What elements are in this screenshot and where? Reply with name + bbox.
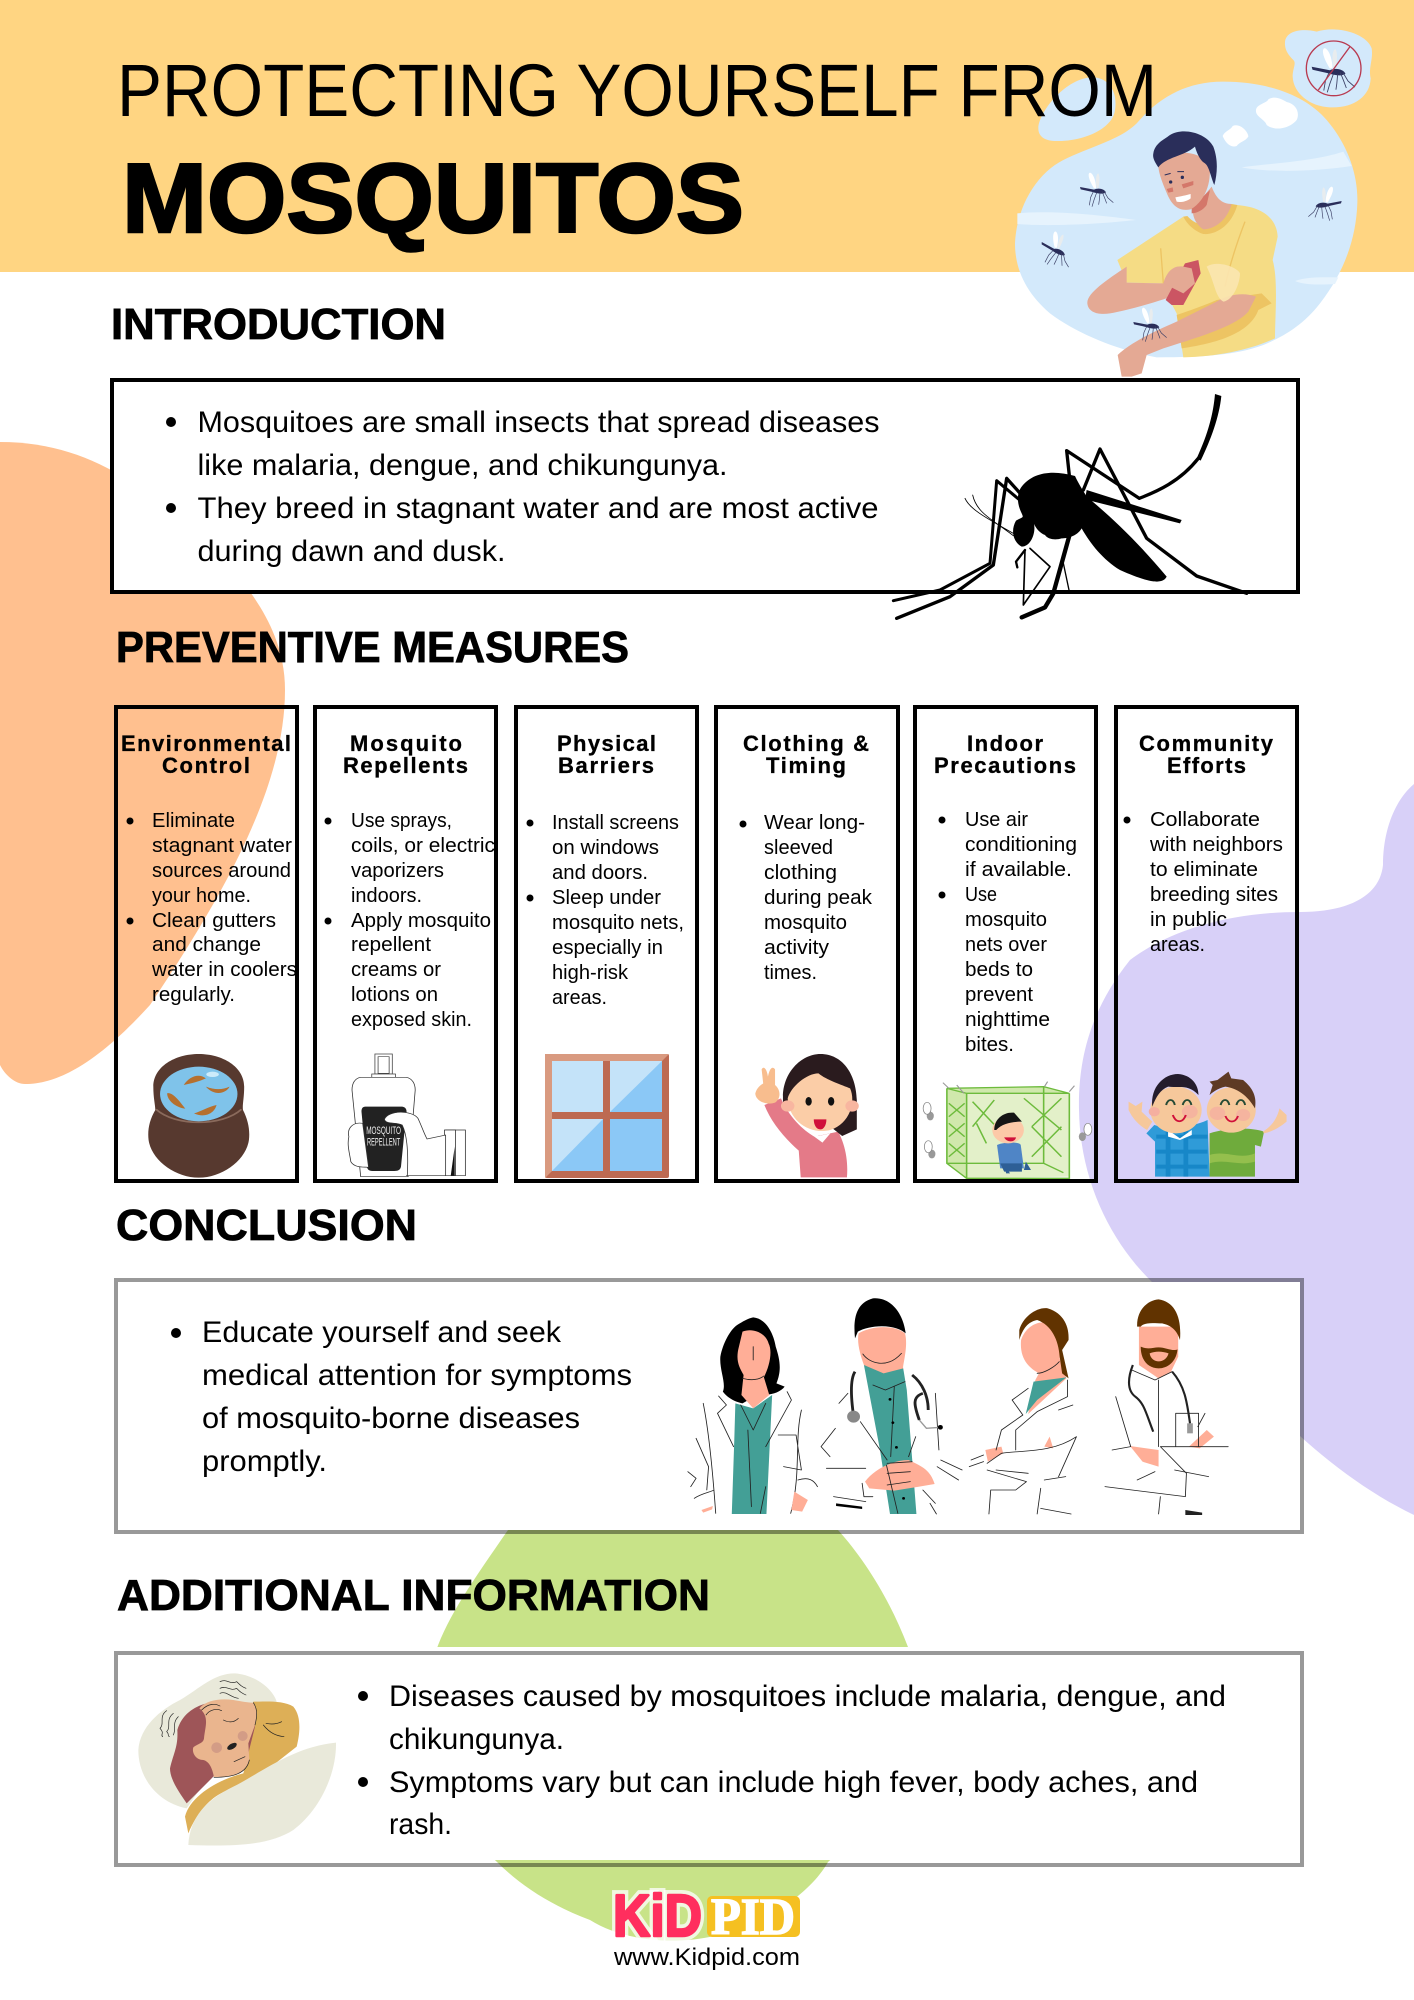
- heading: introduction: INTRODUCTION: [111, 300, 446, 349]
- additional information text: [358, 1680, 1226, 1841]
- heading: Repellents: [343, 753, 468, 778]
- title line 1: PROTECTING YOURSELF FROM: [117, 49, 1157, 132]
- title line 2: MOSQUITOS: [122, 143, 744, 253]
- bullets: [740, 811, 873, 984]
- bullets: Apply mosquito: [351, 909, 491, 932]
- bullets: sleeved: [764, 836, 833, 859]
- heading: Precautions: [934, 753, 1076, 778]
- additional information text: Symptoms vary but can include high fever, body aches, and: [389, 1766, 1198, 1799]
- bullets: [938, 808, 1077, 1056]
- sky blob: [1015, 29, 1372, 357]
- bullets: mosquito: [764, 911, 847, 934]
- heading: Efforts: [1167, 753, 1246, 778]
- additional information text: rash.: [389, 1808, 452, 1841]
- doctor 4: [1105, 1299, 1228, 1515]
- bullets: with neighbors: [1149, 833, 1283, 856]
- introduction text: They breed in stagnant water and are most active: [198, 492, 879, 525]
- illustration: man spraying repellent: [1015, 29, 1372, 377]
- panel: conclusion: [116, 1280, 1302, 1532]
- bullets: water in coolers: [151, 958, 297, 981]
- bullets: Clean gutters: [152, 909, 276, 932]
- bullets: areas.: [552, 986, 607, 1009]
- doctor 2: [821, 1298, 962, 1514]
- heading: conclusion: CONCLUSION: [116, 1201, 417, 1250]
- icon: child under mosquito net: [923, 1082, 1092, 1178]
- bullets: Install screens: [552, 811, 679, 834]
- additional information text: chikungunya.: [389, 1723, 564, 1756]
- bullets: conditioning: [965, 833, 1077, 856]
- bullets: bites.: [965, 1033, 1014, 1056]
- panel: introduction: [112, 380, 1298, 618]
- doctor 1: [688, 1317, 817, 1514]
- header band: [0, 0, 1414, 272]
- bullets: mosquito nets,: [552, 911, 684, 934]
- logo: Kidpid: [613, 1883, 800, 1971]
- heading: Timing: [766, 753, 846, 778]
- doctor 3: [969, 1308, 1076, 1514]
- icon: large mosquito silhouette: [893, 394, 1247, 618]
- panel: clothing and timing: [716, 707, 898, 1181]
- title: [117, 49, 1157, 253]
- bullets: Sleep under: [552, 886, 661, 909]
- bullets: regularly.: [152, 983, 235, 1006]
- bullets: nets over: [965, 933, 1047, 956]
- bullets: [324, 809, 495, 1031]
- icon: two smiling boys: [1129, 1072, 1287, 1177]
- heading: [934, 731, 1076, 778]
- bullets: coils, or electric: [351, 834, 495, 857]
- bullets: Use: [965, 883, 997, 906]
- background blob: purple: [1079, 784, 1414, 1515]
- icon: repellent bottle in hand: [348, 1054, 465, 1177]
- logo word: Pid: PID: [711, 1889, 795, 1946]
- panel: physical barriers: [516, 707, 697, 1181]
- heading: [743, 731, 869, 778]
- bullets: Use sprays,: [351, 809, 452, 832]
- bullets: creams or: [351, 958, 441, 981]
- bullets: Eliminate: [152, 809, 235, 832]
- bullets: activity: [764, 936, 830, 959]
- illustration: woman with fever: [138, 1673, 336, 1846]
- icon: window: [545, 1054, 669, 1178]
- bullets: [126, 809, 297, 1006]
- bullets: your home.: [152, 884, 251, 907]
- bullets: sources around: [152, 859, 291, 882]
- mosquito on arm: [1133, 308, 1167, 342]
- bullets: in public: [1150, 908, 1227, 931]
- panel: mosquito repellents: [315, 707, 496, 1181]
- bullets: to eliminate: [1150, 858, 1258, 881]
- no mosquito sign: [1306, 41, 1361, 96]
- bullets: high-risk: [552, 961, 629, 984]
- background blob: green: [427, 1530, 912, 1941]
- panel: indoor precautions: [915, 707, 1096, 1181]
- heading: [121, 731, 291, 778]
- bullets: Collaborate: [1150, 808, 1260, 831]
- introduction text: during dawn and dusk.: [198, 535, 506, 568]
- panel: additional information: [112, 1647, 1304, 1865]
- man figure: [1087, 131, 1278, 377]
- heading: Community: [1139, 731, 1274, 756]
- heading: Barriers: [558, 753, 654, 778]
- bullets: on windows: [552, 836, 659, 859]
- conclusion text: medical attention for symptoms: [202, 1359, 632, 1392]
- bullets: breeding sites: [1150, 883, 1278, 906]
- bullets: prevent: [965, 983, 1033, 1006]
- heading: preventive measures: PREVENTIVE MEASURES: [116, 623, 629, 672]
- bullets: areas.: [1150, 933, 1205, 956]
- bullets: repellent: [351, 933, 431, 956]
- conclusion text: [171, 1316, 632, 1478]
- logo word: Kid: KiD: [613, 1883, 702, 1949]
- bullets: mosquito: [965, 908, 1047, 931]
- logo glow: KiD: [613, 1883, 702, 1949]
- heading: Environmental: [121, 731, 291, 756]
- conclusion text: Educate yourself and seek: [202, 1316, 562, 1349]
- bullets: [526, 811, 684, 1009]
- introduction text: [166, 406, 880, 568]
- bullets: Use air: [965, 808, 1028, 831]
- heading: additional information: ADDITIONAL INFORMATION: [117, 1571, 710, 1620]
- bullets: lotions on: [351, 983, 438, 1006]
- background blob: orange: [0, 442, 285, 1084]
- icon: repellent bottle in hand: REPELLENT: [367, 1135, 400, 1148]
- mosquitoes: [1036, 173, 1342, 271]
- bullets: Wear long-: [764, 811, 865, 834]
- bullets: stagnant water: [152, 834, 292, 857]
- heading: Control: [162, 753, 250, 778]
- bullets: and change: [152, 933, 261, 956]
- conclusion text: promptly.: [202, 1445, 327, 1478]
- heading: Physical: [557, 731, 656, 756]
- bullets: during peak: [764, 886, 873, 909]
- icon: repellent bottle in hand: MOSQUITO: [366, 1124, 401, 1137]
- bullets: if available.: [965, 858, 1072, 881]
- bullets: times.: [764, 961, 817, 984]
- icon: girl making a peace sign: [755, 1054, 859, 1177]
- bullets: indoors.: [351, 884, 422, 907]
- introduction text: like malaria, dengue, and chikungunya.: [198, 449, 728, 482]
- heading: [1139, 731, 1274, 778]
- conclusion text: of mosquito-borne diseases: [202, 1402, 580, 1435]
- clouds: [1223, 98, 1298, 146]
- bullets: clothing: [764, 861, 837, 884]
- logo url: www.Kidpid.com: [613, 1944, 800, 1971]
- bullets: nighttime: [965, 1008, 1050, 1031]
- bullets: [1124, 808, 1283, 956]
- panel: environmental control: [116, 707, 297, 1181]
- illustration: four doctors: [688, 1298, 1228, 1515]
- logo badge: [707, 1896, 800, 1937]
- heading: Indoor: [967, 731, 1043, 756]
- additional information text: Diseases caused by mosquitoes include malaria, dengue, and: [389, 1680, 1226, 1713]
- bullets: vaporizers: [351, 859, 444, 882]
- heading: Mosquito: [350, 731, 462, 756]
- heading: Clothing &: [743, 731, 869, 756]
- icon: pot of larvae: [148, 1054, 249, 1178]
- bullets: beds to: [965, 958, 1033, 981]
- bullets: and doors.: [552, 861, 648, 884]
- heading: [343, 731, 468, 778]
- heading: [557, 731, 656, 778]
- bullets: especially in: [552, 936, 663, 959]
- panel: community efforts: [1116, 707, 1297, 1181]
- bullets: exposed skin.: [351, 1008, 472, 1031]
- introduction text: Mosquitoes are small insects that spread diseases: [198, 406, 880, 439]
